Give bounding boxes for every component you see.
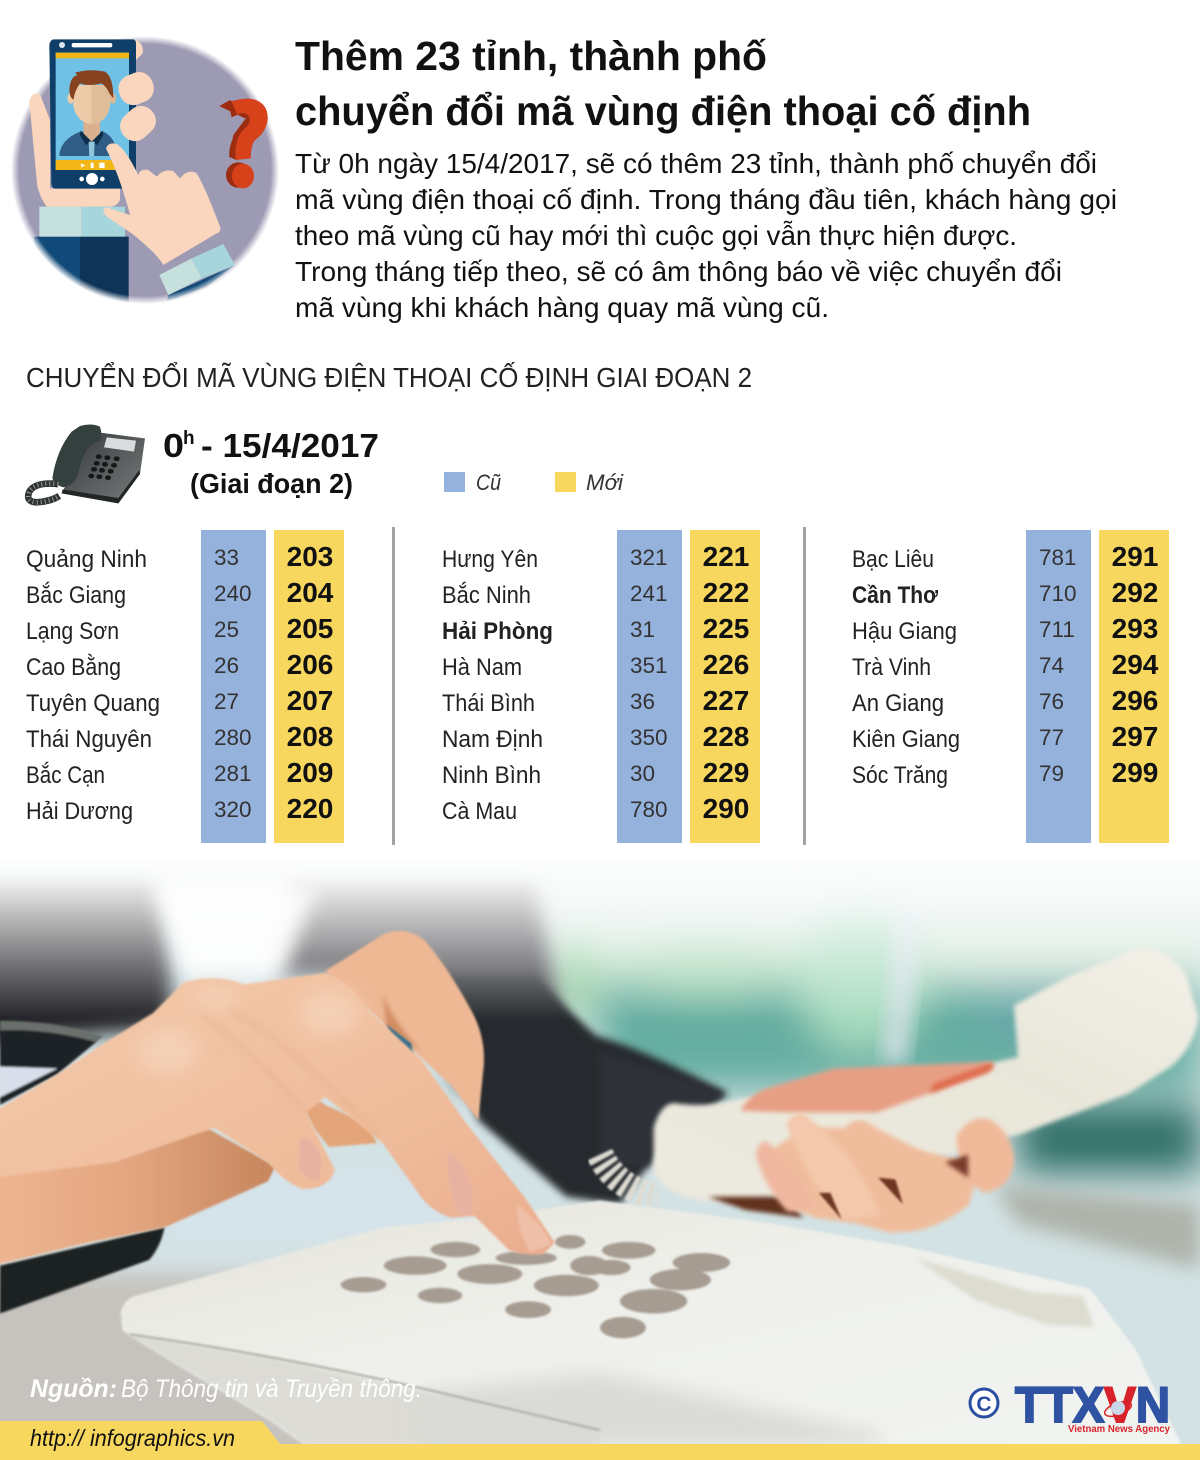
table column 2: 226 <box>703 649 749 680</box>
icon: desk telephone <box>28 424 145 503</box>
table column 3: An Giang <box>852 690 944 717</box>
table column 3: 292 <box>1112 577 1158 608</box>
table column 3: 74 <box>1039 653 1064 678</box>
table column 2: 228 <box>703 721 749 752</box>
table column 1: 209 <box>287 757 333 788</box>
phone keypad <box>341 1235 730 1338</box>
table column 2: 229 <box>703 757 749 788</box>
palm <box>765 1128 968 1233</box>
table column 3: 710 <box>1039 581 1077 606</box>
phone front fingers <box>114 68 162 147</box>
shirt cuff <box>39 207 125 237</box>
table column 3: Hậu Giang <box>852 618 957 645</box>
intro text block: mã vùng khi khách hàng quay mã vùng cũ. <box>295 292 829 323</box>
table column 3: Kiên Giang <box>852 726 960 753</box>
table column 2: 31 <box>630 617 655 642</box>
table column 3: 711 <box>1039 617 1075 642</box>
main hand and index finger <box>0 973 555 1255</box>
intro text block: Từ 0h ngày 15/4/2017, sẽ có thêm 23 tỉnh, thành phố chuyển đổi <box>295 148 1097 179</box>
left sleeve with cuff <box>0 1021 165 1313</box>
table column 1: Thái Nguyên <box>26 726 152 753</box>
title: Thêm 23 tỉnh, thành phố <box>295 33 767 79</box>
table column 2: 290 <box>703 793 749 824</box>
table column 1: Bắc Giang <box>26 582 126 609</box>
table column 3: 297 <box>1112 721 1158 752</box>
logo: TTXVN Vietnam News Agency: C <box>976 1393 992 1416</box>
table column 1: Tuyên Quang <box>26 690 160 717</box>
speaker slots on phone <box>915 1258 1094 1327</box>
table column 3: 781 <box>1039 545 1077 570</box>
table column 2: 350 <box>630 725 668 750</box>
table column 3: 294 <box>1112 649 1159 680</box>
nails <box>298 1139 551 1252</box>
handset cord <box>600 1155 658 1197</box>
pointing hand cuff <box>159 244 235 295</box>
table column 1: 33 <box>214 545 239 570</box>
table column 3: 296 <box>1112 685 1158 716</box>
table column 2: 225 <box>703 613 749 644</box>
smartphone screen <box>56 42 129 185</box>
table column 1: 220 <box>287 793 333 824</box>
handset <box>654 946 1199 1202</box>
legend: Mới <box>586 470 624 495</box>
table column 2: 36 <box>630 689 655 714</box>
table column 2: 227 <box>703 685 749 716</box>
table column 1: 240 <box>214 581 252 606</box>
finger creases <box>199 1009 379 1136</box>
table column 3: Trà Vinh <box>852 654 931 681</box>
man portrait on screen <box>59 70 118 156</box>
table column 1: Hải Dương <box>26 798 133 825</box>
blurred desk and office background <box>0 849 1200 1460</box>
table column 3: 293 <box>1112 613 1158 644</box>
table column 3: 76 <box>1039 689 1064 714</box>
table column 1: 27 <box>214 689 239 714</box>
table column 1: 205 <box>287 613 333 644</box>
phone back finger top <box>135 39 143 60</box>
table column 2: 241 <box>630 581 668 606</box>
table column 2: 351 <box>630 653 668 678</box>
knuckle highlights <box>138 986 360 1074</box>
table column 2: Nam Định <box>442 726 543 753</box>
date heading: h <box>183 428 195 449</box>
date heading: (Giai đoạn 2) <box>190 468 353 499</box>
table column 2: Hà Nam <box>442 654 522 681</box>
table column 3: 291 <box>1112 541 1158 572</box>
table column 3: Sóc Trăng <box>852 762 948 789</box>
table column 2: Bắc Ninh <box>442 582 531 609</box>
table column 1: 280 <box>214 725 252 750</box>
table column 1: 281 <box>214 761 252 786</box>
dialing hand <box>0 931 555 1266</box>
palm underside <box>0 1128 276 1266</box>
table column 1: Lạng Sơn <box>26 618 119 645</box>
legend: Cũ <box>476 470 501 495</box>
intro text block: mã vùng điện thoại cố định. Trong tháng đầu tiên, khách hàng gọi <box>295 184 1117 215</box>
table column 3: Cần Thơ <box>852 582 939 609</box>
footer bar with url tab: http:// infographics.vn <box>30 1425 235 1451</box>
table column 3: Bạc Liêu <box>852 546 934 573</box>
green foliage right <box>547 898 1200 1174</box>
table column 3: 299 <box>1112 757 1158 788</box>
table column 2: 30 <box>630 761 655 786</box>
smartphone body <box>49 39 136 189</box>
legend <box>444 470 624 495</box>
photo: hand dialing a white desk telephone <box>0 849 1200 1460</box>
illustration: hand holding smartphone with question mark <box>11 36 279 307</box>
date heading <box>163 427 379 499</box>
table column 1: 208 <box>287 721 333 752</box>
logo: TTXVN Vietnam News Agency: TTXVN <box>1015 1377 1170 1433</box>
table column 3: 79 <box>1039 761 1064 786</box>
table column 2: 221 <box>703 541 749 572</box>
table column 2 <box>442 530 760 843</box>
dark clothing <box>0 883 574 1090</box>
table column 1: 26 <box>214 653 239 678</box>
source credit: Bộ Thông tin và Truyền thông. <box>121 1375 422 1403</box>
table column 2: 780 <box>630 797 668 822</box>
table column 3 <box>852 530 1169 843</box>
title <box>295 33 1031 134</box>
intro text block: theo mã vùng cũ hay mới thì cuộc gọi vẫn thực hiện được. <box>295 220 1017 251</box>
table column 2: Thái Bình <box>442 690 535 717</box>
intro text block: Trong tháng tiếp theo, sẽ có âm thông báo về việc chuyển đổi <box>295 256 1062 287</box>
intro text block <box>295 148 1117 323</box>
desk phone base <box>121 1201 1182 1445</box>
section heading: CHUYỂN ĐỔI MÃ VÙNG ĐIỆN THOẠI CỐ ĐỊNH GIAI ĐOẠN 2 <box>26 361 752 393</box>
table column 1: Bắc Cạn <box>26 762 105 789</box>
table column 1: 207 <box>287 685 333 716</box>
table column 1: 25 <box>214 617 239 642</box>
table column 1: Cao Bằng <box>26 654 121 681</box>
table column 2: Cà Mau <box>442 798 517 825</box>
table column 1: 320 <box>214 797 252 822</box>
title: chuyển đổi mã vùng điện thoại cố định <box>295 88 1031 134</box>
back finger <box>325 931 484 1120</box>
footer bar with url tab <box>0 1421 1200 1460</box>
date heading: 0 <box>163 427 184 464</box>
table column 1: 204 <box>287 577 334 608</box>
table column 1: 206 <box>287 649 333 680</box>
pointing hand <box>103 143 220 265</box>
back hand palm <box>29 94 120 207</box>
table column 2: Ninh Bình <box>442 762 541 789</box>
table column 1 <box>26 530 344 843</box>
source credit: Nguồn: <box>30 1375 117 1403</box>
table column 2: Hưng Yên <box>442 546 538 573</box>
question mark <box>219 99 268 188</box>
table column 1: Quảng Ninh <box>26 546 147 573</box>
curled middle finger <box>298 1096 377 1147</box>
holding hand <box>708 1062 1014 1233</box>
logo: TTXVN Vietnam News Agency: Vietnam News Agency <box>1068 1423 1170 1435</box>
table column 2: Hải Phòng <box>442 618 553 645</box>
table column 1: 203 <box>287 541 333 572</box>
white fade at top <box>0 849 1200 1021</box>
table column 3: 77 <box>1039 725 1064 750</box>
table column 2: 321 <box>630 545 668 570</box>
table column 2: 222 <box>703 577 749 608</box>
date heading: - 15/4/2017 <box>201 427 379 464</box>
